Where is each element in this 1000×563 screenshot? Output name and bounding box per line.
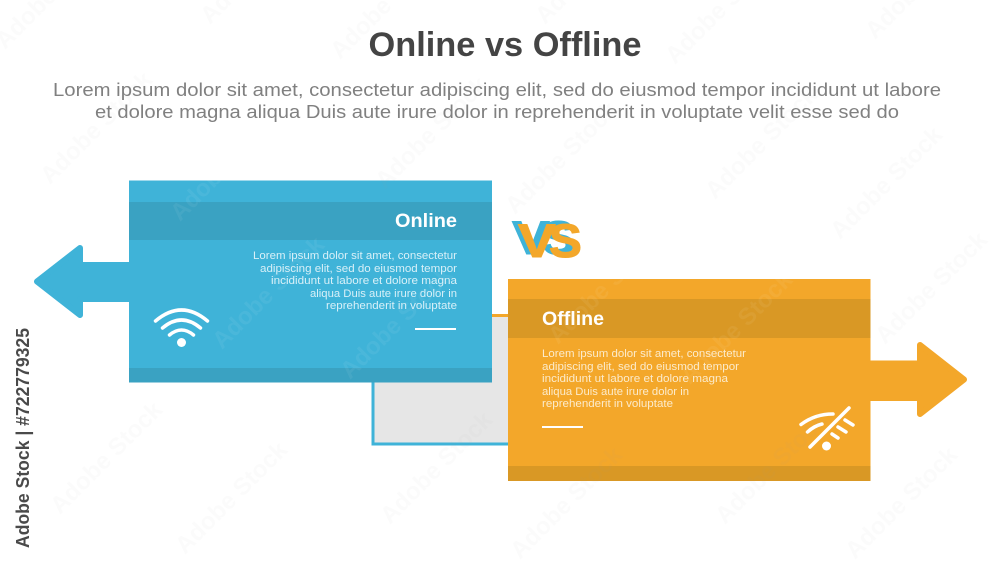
offline body text: aliqua Duis aute irure dolor in xyxy=(542,386,689,398)
offline body text: adipiscing elit, sed do eiusmod tempor xyxy=(542,361,739,373)
offline body text xyxy=(542,348,746,410)
offline card background xyxy=(508,279,870,481)
connector square behind panels xyxy=(373,315,513,444)
stock watermark pattern: Adobe Stock xyxy=(840,441,963,563)
stock watermark pattern: Adobe Stock xyxy=(170,436,293,559)
stock id label: Adobe Stock | #722779325 xyxy=(13,328,33,548)
vs badge xyxy=(512,212,582,268)
icon: wifi xyxy=(156,310,208,347)
offline header band xyxy=(508,299,870,338)
stock watermark pattern: Adobe Stock xyxy=(505,441,628,563)
subtitle text xyxy=(53,79,941,122)
stock watermark on panels: Adobe Stock xyxy=(675,266,798,389)
title: Online vs Offline xyxy=(368,26,642,64)
online divider dash xyxy=(415,328,456,330)
stock watermark pattern: Adobe Stock xyxy=(700,81,823,204)
stock watermark on panels: Adobe Stock xyxy=(165,103,288,226)
online body text: Lorem ipsum dolor sit amet, consectetur xyxy=(253,250,457,262)
online header band xyxy=(129,202,492,240)
stock watermark pattern: Adobe Stock xyxy=(500,96,623,219)
stock watermark on panels: Adobe Stock xyxy=(335,261,458,384)
panel: online xyxy=(37,180,492,382)
stock watermark pattern: Adobe Stock xyxy=(710,406,833,529)
offline body text: Lorem ipsum dolor sit amet, consectetur xyxy=(542,348,746,360)
vs badge: S xyxy=(542,212,575,265)
subtitle text: et dolore magna aliqua Duis aute irure dolor in reprehenderit in voluptate velit esse sed do xyxy=(95,101,899,122)
subtitle text: Lorem ipsum dolor sit amet, consectetur adipiscing elit, sed do eiusmod tempor incididunt ut labore xyxy=(53,79,941,100)
vs badge: S xyxy=(549,215,582,268)
offline divider dash xyxy=(542,426,583,428)
arrow: right xyxy=(868,345,964,414)
online body text: adipiscing elit, sed do eiusmod tempor xyxy=(260,263,457,275)
online footer band xyxy=(129,368,492,382)
panel: offline xyxy=(508,279,964,481)
online body text: reprehenderit in voluptate xyxy=(326,300,457,312)
online body text: aliqua Duis aute irure dolor in xyxy=(310,288,457,300)
vs badge: V xyxy=(518,215,556,268)
stock watermark pattern: Adobe Stock xyxy=(45,396,168,519)
online body text xyxy=(253,250,458,312)
stock watermark on panels xyxy=(165,103,798,389)
online body text: incididunt ut labore et dolore magna xyxy=(271,275,458,287)
offline footer band xyxy=(508,466,870,481)
stock watermark pattern: Adobe Stock xyxy=(825,121,948,244)
icon: wifi off xyxy=(801,408,853,450)
offline heading: Offline xyxy=(542,309,604,330)
offline body text: incididunt ut labore et dolore magna xyxy=(542,373,729,385)
vs badge: V xyxy=(512,212,550,265)
stock watermark pattern: Adobe Stock xyxy=(35,66,158,189)
arrow: left xyxy=(37,248,131,315)
offline body text: reprehenderit in voluptate xyxy=(542,398,673,410)
stock watermark pattern: Adobe Stock xyxy=(870,226,993,349)
stock watermark pattern: Adobe Stock xyxy=(375,406,498,529)
online card background xyxy=(129,180,492,382)
online heading: Online xyxy=(395,211,457,232)
stock watermark on panels: Adobe Stock xyxy=(207,231,330,354)
stock watermark pattern: Adobe Stock xyxy=(370,71,493,194)
stock watermark on panels: Adobe Stock xyxy=(543,226,666,349)
